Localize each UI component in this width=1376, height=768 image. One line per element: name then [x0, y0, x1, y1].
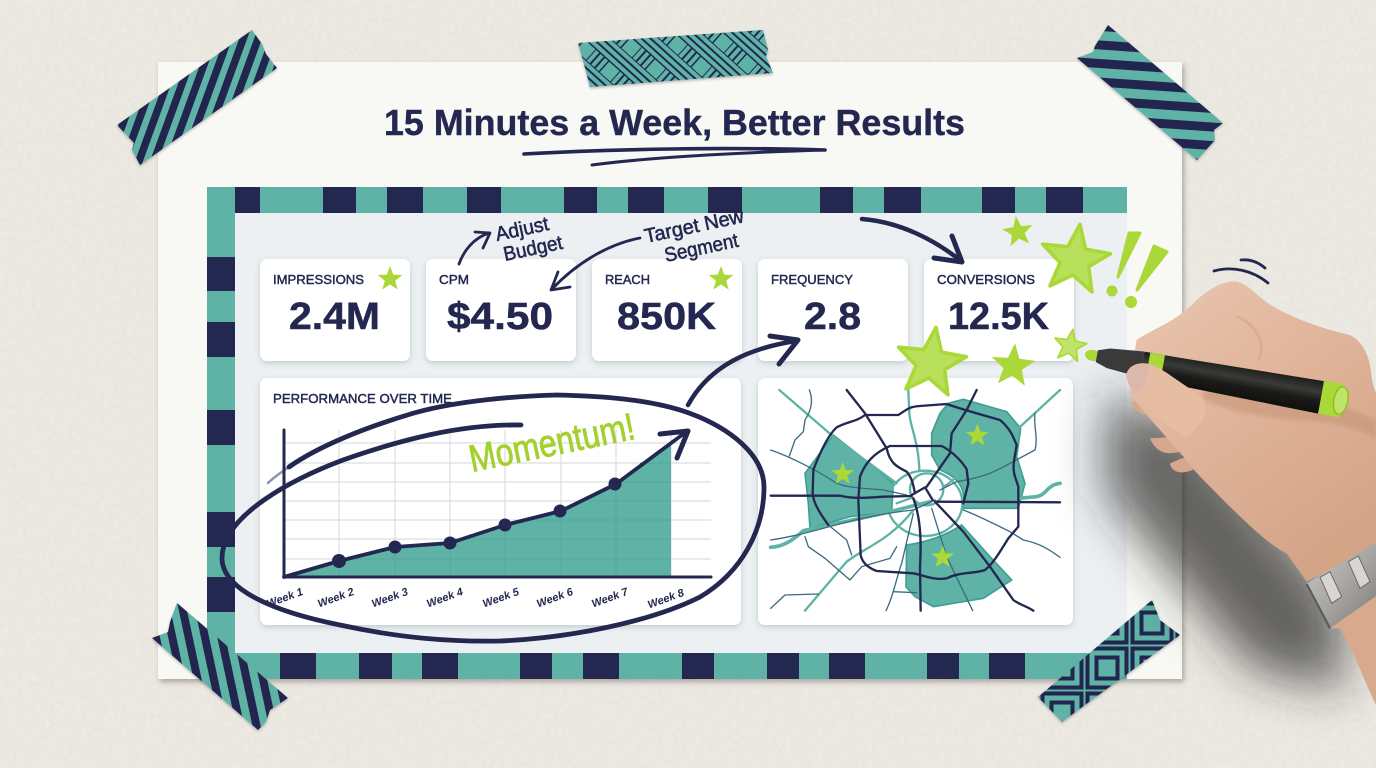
chart grid over area	[339, 463, 671, 577]
KPI card: conversions	[924, 259, 1074, 361]
week labels: Week 7	[590, 586, 631, 610]
note: adjust budget	[493, 213, 565, 266]
week labels: Week 6	[535, 586, 576, 610]
paper sheet	[158, 62, 1182, 679]
panel: performance over time chart	[260, 378, 741, 625]
performance line with arrow	[284, 431, 688, 577]
map teal roads	[771, 390, 1060, 611]
map main navy roads	[771, 390, 1060, 611]
data points	[332, 478, 622, 568]
KPI card: CPM	[426, 259, 576, 361]
KPI card: impressions: 2.4M	[289, 296, 380, 338]
note: target new segment: Target New	[642, 205, 746, 248]
arrow: to conversions	[862, 219, 962, 262]
KPI card: conversions: 12.5K	[948, 296, 1050, 338]
KPI card: frequency: 2.8	[804, 296, 861, 338]
map thin streets	[771, 390, 1060, 611]
week labels: Week 3	[370, 586, 410, 610]
map zone stars	[831, 424, 989, 567]
KPI card: CPM: $4.50	[447, 296, 553, 338]
week labels: Week 1	[265, 586, 305, 610]
week labels: Week 2	[316, 586, 356, 610]
KPI card: CPM: CPM	[439, 272, 469, 287]
momentum handwritten note: Momentum!	[465, 406, 638, 481]
chart axes	[284, 430, 711, 577]
note: target new segment	[642, 205, 746, 267]
KPI card: conversions: CONVERSIONS	[937, 272, 1035, 287]
title underline scribble	[524, 149, 825, 165]
arrow: adjust budget	[459, 232, 490, 264]
note: adjust budget: Budget	[501, 232, 565, 266]
marker pen	[1082, 337, 1351, 418]
dashboard frame with checkered border	[207, 187, 1127, 679]
hand cast shadow	[1105, 395, 1345, 690]
tape: bottom left striped	[152, 603, 288, 730]
chart grid	[284, 430, 711, 577]
KPI card: impressions	[260, 259, 410, 361]
KPI card: frequency: FREQUENCY	[771, 272, 853, 287]
chart heading: PERFORMANCE OVER TIME	[273, 391, 452, 406]
KPI card: frequency	[758, 259, 908, 361]
stars and exclamation marks doodle	[893, 214, 1167, 397]
map highlighted zones	[805, 399, 1025, 607]
hand motion lines	[1214, 260, 1268, 283]
week labels: Week 8	[646, 587, 687, 611]
note: adjust budget: Adjust	[493, 213, 551, 246]
panel: city map	[758, 378, 1073, 625]
title: 15 Minutes a Week, Better Results	[384, 102, 965, 143]
tape: top right striped	[1077, 25, 1223, 160]
hand holding marker	[1082, 281, 1376, 713]
KPI card: impressions: IMPRESSIONS	[273, 272, 364, 287]
thumbnail	[1127, 365, 1149, 393]
arrow: target segment to CPM	[551, 238, 640, 290]
tape: bottom right diamonds	[1038, 600, 1180, 722]
KPI card: reach: 850K	[617, 296, 717, 338]
hand and fingers	[1130, 281, 1376, 713]
KPI card: reach: REACH	[605, 272, 650, 287]
thumb	[1126, 363, 1206, 437]
tape: top center woven	[578, 30, 773, 87]
wristwatch	[1306, 540, 1376, 628]
tape: top left striped	[117, 30, 277, 165]
KPI card: reach	[592, 259, 742, 361]
note: target new segment: Segment	[662, 230, 741, 267]
area fill under line	[284, 441, 671, 577]
week labels: Week 4	[425, 586, 465, 610]
circled momentum scribble	[222, 395, 764, 641]
week labels: Week 5	[481, 586, 522, 610]
arrow: chart to frequency	[688, 336, 798, 405]
week labels	[265, 586, 687, 611]
